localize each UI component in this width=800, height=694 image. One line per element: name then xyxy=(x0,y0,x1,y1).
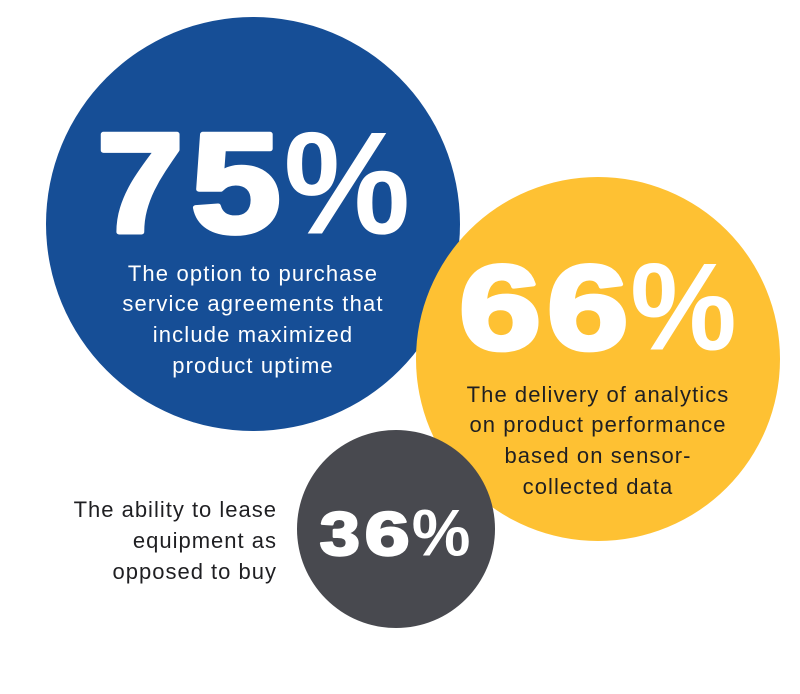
text: 66% description: based on sensor- xyxy=(504,443,692,468)
text: 66% description xyxy=(467,382,729,499)
stat: 75% xyxy=(97,101,410,265)
text: 36% description: equipment as xyxy=(133,528,277,553)
text: 75% description: product uptime xyxy=(172,353,334,378)
text: 36% description xyxy=(74,497,277,584)
text: 75% description: include maximized xyxy=(153,322,353,347)
stat: 66% xyxy=(459,238,737,376)
text: 36% description: opposed to buy xyxy=(113,559,277,584)
text: 66% description: The delivery of analytics xyxy=(467,382,729,407)
panel: 66% yellow circle xyxy=(416,177,780,541)
stat: 75%: 7 xyxy=(97,104,184,262)
stat: 36%: 3 xyxy=(320,501,360,569)
text: 66% description: collected data xyxy=(523,474,673,499)
stat: 36%: 6 xyxy=(365,500,409,569)
text: 75% description xyxy=(122,261,384,378)
text: 36% description: The ability to lease xyxy=(74,497,277,522)
text: 75% description: The option to purchase xyxy=(128,261,378,286)
stat: 36% xyxy=(320,496,470,570)
stat: 66%: 6 xyxy=(547,241,628,375)
stat: 66%: 6 xyxy=(459,240,541,375)
stat: 75%: 5 xyxy=(191,104,281,263)
stat: 75%: % xyxy=(284,101,410,265)
text: 66% description: on product performance xyxy=(469,412,727,437)
stat: 66%: % xyxy=(630,238,737,376)
stat: 36%: % xyxy=(412,496,470,570)
text: 75% description: service agreements that xyxy=(122,291,384,316)
panel: 75% blue circle xyxy=(46,17,460,431)
panel: 36% dark circle xyxy=(297,430,495,628)
